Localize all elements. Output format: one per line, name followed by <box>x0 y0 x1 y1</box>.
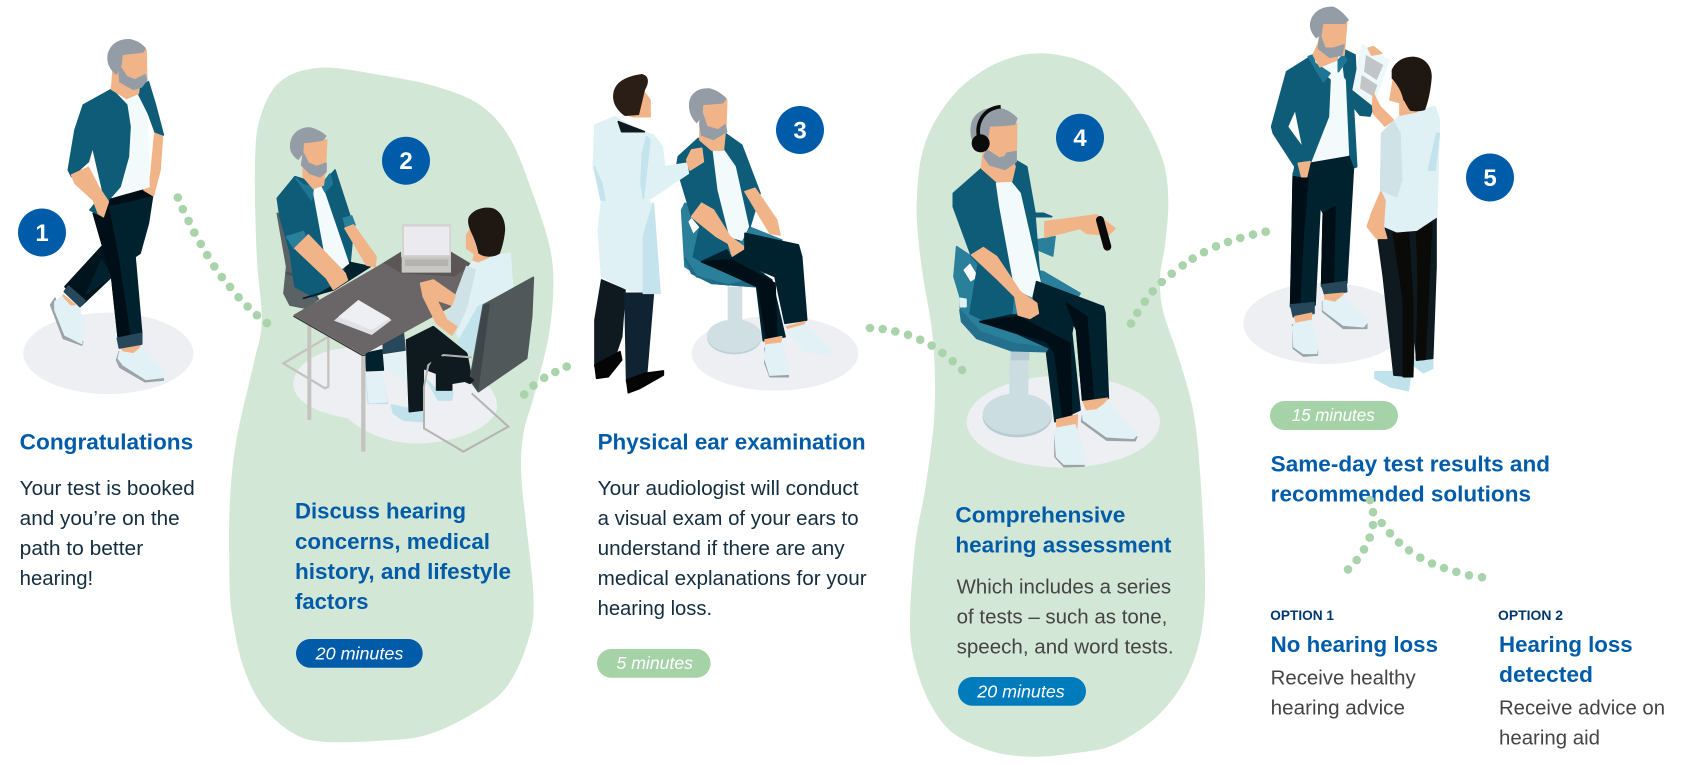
text block: option 1 <box>1270 607 1438 719</box>
pill: step 4 duration: 20 minutes <box>976 681 1065 701</box>
text block: option 2: detected <box>1499 662 1593 687</box>
text block: step 4 Comprehensive hearing assessment <box>955 503 1174 658</box>
pill: step 4 duration <box>958 677 1086 706</box>
text block: option 2: OPTION 2 <box>1498 607 1563 623</box>
text block: option 1: Receive healthy <box>1271 667 1416 689</box>
pill: step 5 duration <box>1270 401 1398 430</box>
arrow: dotted branches to options <box>1344 496 1486 582</box>
badge: step number 5 <box>1466 154 1514 202</box>
arrow: dotted path from step 1 to step 2 <box>174 193 271 327</box>
illustration: man and audiologist reviewing results, step 5 <box>1243 7 1439 391</box>
text block: step 4 Comprehensive hearing assessment: Which includes a series <box>957 576 1171 598</box>
badge: step number 3 <box>776 106 824 154</box>
text block: step 3 Physical ear examination <box>598 430 867 620</box>
badge: step number 4 <box>1056 114 1104 162</box>
text block: step 3 Physical ear examination: hearing loss. <box>598 598 712 620</box>
arrow: dotted path from step 3 to step 4 <box>866 324 966 374</box>
text block: option 2: hearing aid <box>1499 727 1600 749</box>
arrow: dotted path from step 2 to step 3 <box>520 362 571 399</box>
illustration: doctor examining patient, step 3 <box>593 74 858 393</box>
text block: option 1: hearing advice <box>1271 697 1405 719</box>
badge: step number 5: 5 <box>1483 165 1497 192</box>
text block: option 2 <box>1498 607 1665 749</box>
text block: step 2 heading: Discuss hearing <box>295 499 466 524</box>
text block: option 2: Hearing loss <box>1499 632 1633 657</box>
arrow: dotted path from step 4 to step 5 <box>1127 227 1270 328</box>
pill: step 3 duration: 5 minutes <box>616 653 693 673</box>
text block: step 1 Congratulations: path to better <box>20 538 144 560</box>
text block: step 1 Congratulations: hearing! <box>20 568 93 590</box>
text block: step 3 Physical ear examination: a visual exam of your ears to <box>598 508 859 530</box>
text block: step 2 heading <box>295 499 511 614</box>
pill: step 2 duration: 20 minutes <box>315 643 404 663</box>
badge: step number 4: 4 <box>1073 125 1087 152</box>
text block: step 2 heading: factors <box>295 589 368 614</box>
pill: step 2 duration <box>296 639 423 668</box>
text block: option 1: OPTION 1 <box>1270 607 1334 623</box>
text block: step 4 Comprehensive hearing assessment: hearing assessment <box>955 533 1172 558</box>
text block: step 4 Comprehensive hearing assessment: of tests – such as tone, <box>957 606 1167 628</box>
badge: step number 3: 3 <box>793 118 807 144</box>
illustration: consultation at desk, step 2 <box>277 127 533 452</box>
text block: option 2: Receive advice on <box>1499 697 1665 719</box>
text block: step 3 Physical ear examination: medical explanations for your <box>598 568 867 590</box>
text block: step 3 Physical ear examination: Physical ear examination <box>598 430 866 454</box>
text block: step 5 heading <box>1271 452 1550 507</box>
text block: step 1 Congratulations: Congratulations <box>20 430 193 454</box>
pill: step 3 duration <box>597 649 711 678</box>
text block: step 5 heading: recommended solutions <box>1271 482 1531 507</box>
illustration: walking man, step 1 <box>23 39 193 394</box>
panel: step 4 green blob <box>910 53 1205 757</box>
text block: step 4 Comprehensive hearing assessment: speech, and word tests. <box>957 636 1174 658</box>
text block: step 1 Congratulations: Your test is booked <box>20 478 195 500</box>
text block: step 2 heading: concerns, medical <box>295 529 490 554</box>
text block: step 4 Comprehensive hearing assessment: Comprehensive <box>955 503 1125 528</box>
text block: step 3 Physical ear examination: Your audiologist will conduct <box>598 478 859 500</box>
text block: option 1: No hearing loss <box>1271 632 1438 657</box>
pill: step 5 duration: 15 minutes <box>1292 405 1375 425</box>
text block: step 1 Congratulations <box>20 430 195 590</box>
text block: step 3 Physical ear examination: understand if there are any <box>598 538 845 560</box>
text block: step 2 heading: history, and lifestyle <box>295 559 511 584</box>
text block: step 1 Congratulations: and you’re on the <box>20 508 180 530</box>
illustration: man in headphones with response button, step 4 <box>953 107 1160 468</box>
panel: step 2 green blob <box>229 68 553 742</box>
badge: step number 2 <box>382 137 430 185</box>
badge: step number 1: 1 <box>35 220 49 247</box>
badge: step number 2: 2 <box>399 148 413 175</box>
text block: step 5 heading: Same-day test results and <box>1271 452 1550 477</box>
badge: step number 1 <box>18 208 66 256</box>
